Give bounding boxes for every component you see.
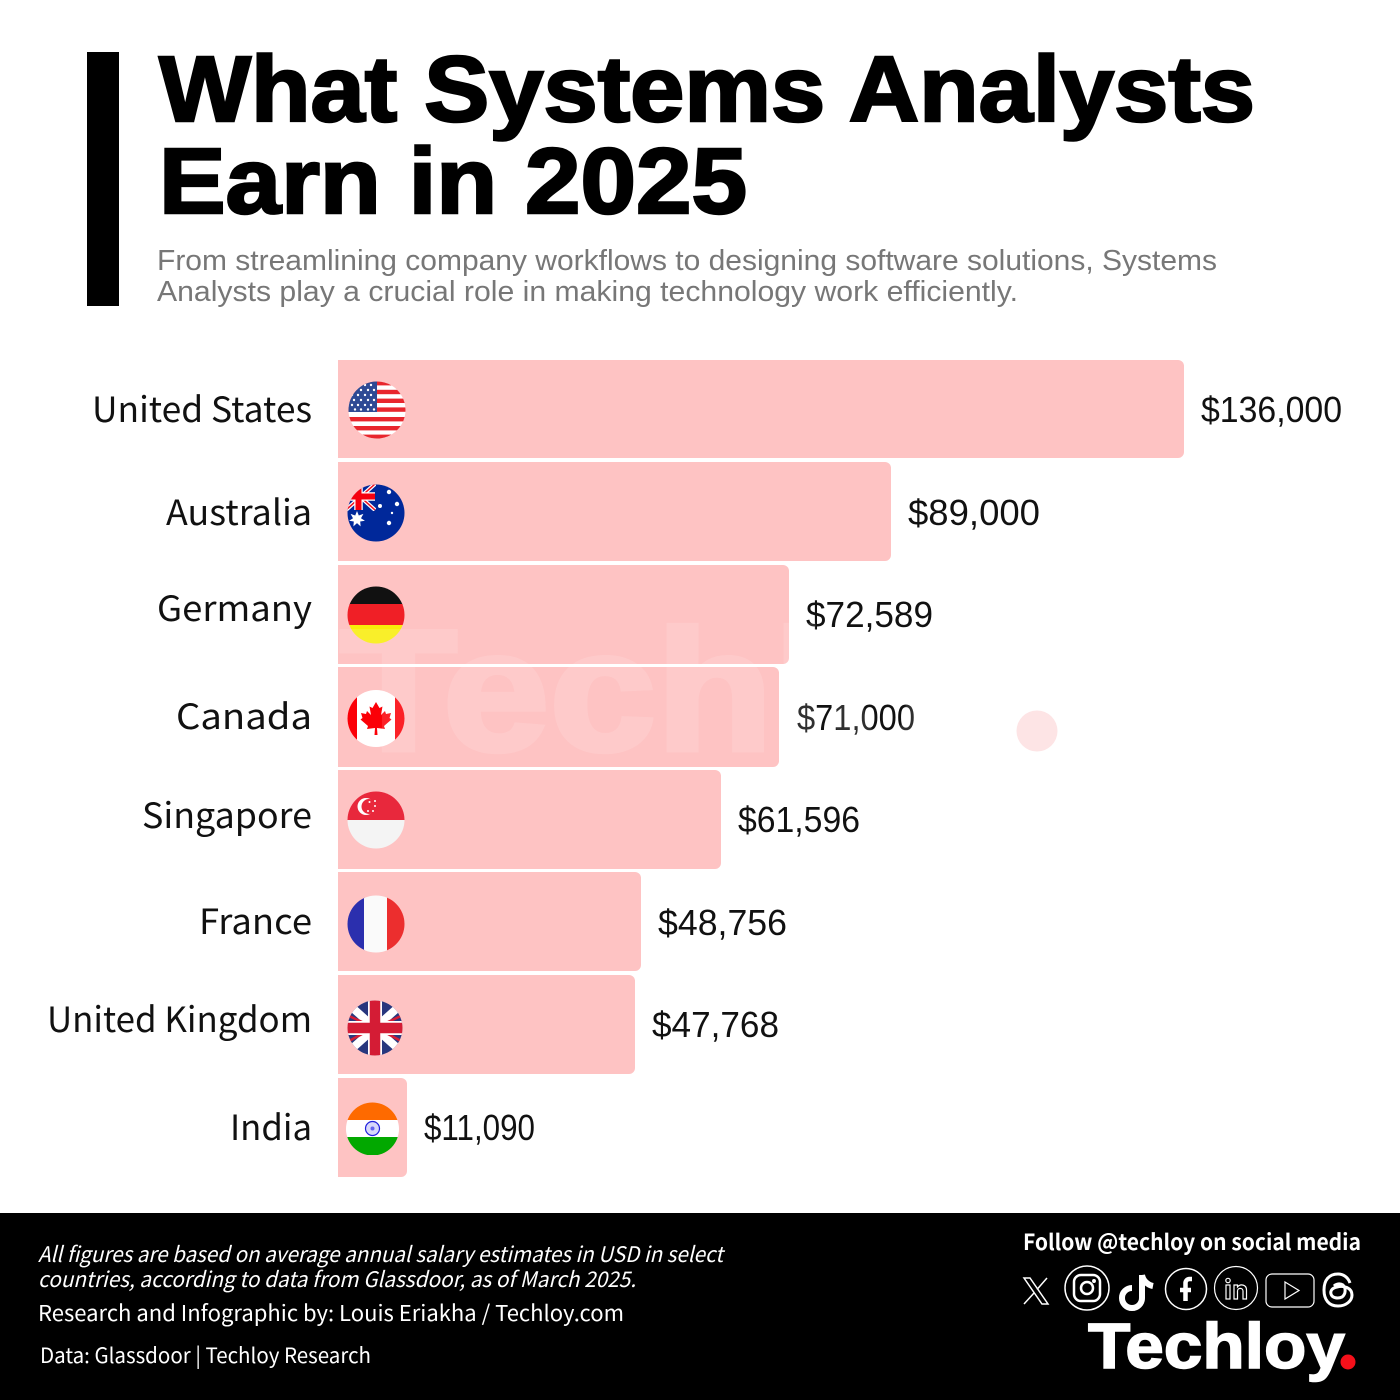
row: Canada	[176, 667, 915, 767]
row: Canada: Canada	[176, 689, 312, 740]
icon: YouTube	[1266, 1274, 1314, 1307]
subtitle: From streamlining company workflows to designing software solutions, Systems	[157, 245, 1217, 277]
icon: TikTok	[1122, 1275, 1153, 1308]
watermark: Techloy	[340, 595, 1050, 787]
row: United Kingdom: $47,768	[652, 1004, 779, 1045]
icon: Threads	[1324, 1274, 1352, 1306]
row: Australia	[166, 462, 1040, 561]
subtitle: Analysts play a crucial role in making technology work efficiently.	[157, 276, 1018, 308]
row: France	[199, 872, 787, 971]
row: United Kingdom	[47, 975, 779, 1074]
row: United States: $136,000	[1201, 389, 1342, 430]
social heading: Follow @techloy on social media	[1023, 1225, 1361, 1257]
row: United Kingdom: United Kingdom	[47, 992, 312, 1043]
bar chart	[47, 360, 1342, 1177]
row: United States: United States	[92, 382, 312, 433]
row: Canada: $71,000	[797, 697, 915, 738]
footnote: countries, according to data from Glassdoor, as of March 2025.	[38, 1263, 636, 1294]
title: What Systems Analysts	[159, 37, 1255, 141]
watermark	[351, 623, 1058, 752]
accent bar	[87, 52, 119, 306]
icon: LinkedIn	[1214, 1266, 1258, 1310]
row: United States	[92, 360, 1342, 458]
title: Earn in 2025	[159, 129, 747, 233]
credit: Research and Infographic by: Louis Eriakha / Techloy.com	[38, 1296, 624, 1328]
row: Germany: $72,589	[806, 594, 933, 635]
source: Data: Glassdoor | Techloy Research	[40, 1340, 371, 1370]
title	[159, 37, 1255, 233]
row: Singapore: $61,596	[738, 799, 860, 840]
icon: Instagram	[1065, 1266, 1109, 1310]
icon: X	[1024, 1278, 1048, 1304]
row: Australia: Australia	[166, 485, 312, 536]
row: Singapore	[142, 770, 860, 869]
footnote: All figures are based on average annual salary estimates in USD in select	[38, 1238, 726, 1269]
row: Singapore: Singapore	[142, 788, 312, 839]
social icons	[1024, 1266, 1352, 1310]
row: India: $11,090	[424, 1107, 535, 1148]
row: Australia: $89,000	[908, 492, 1040, 533]
row: France: $48,756	[658, 902, 787, 943]
logo: Techloy	[1088, 1310, 1345, 1382]
footer panel	[0, 1213, 1400, 1400]
row: India: India	[230, 1100, 312, 1151]
footnote	[38, 1238, 726, 1294]
icon: Facebook	[1166, 1268, 1206, 1310]
row: Germany	[157, 565, 933, 664]
row: France: France	[199, 894, 312, 945]
row: Germany: Germany	[157, 581, 312, 632]
subtitle	[157, 245, 1217, 308]
row: India	[230, 1078, 535, 1177]
